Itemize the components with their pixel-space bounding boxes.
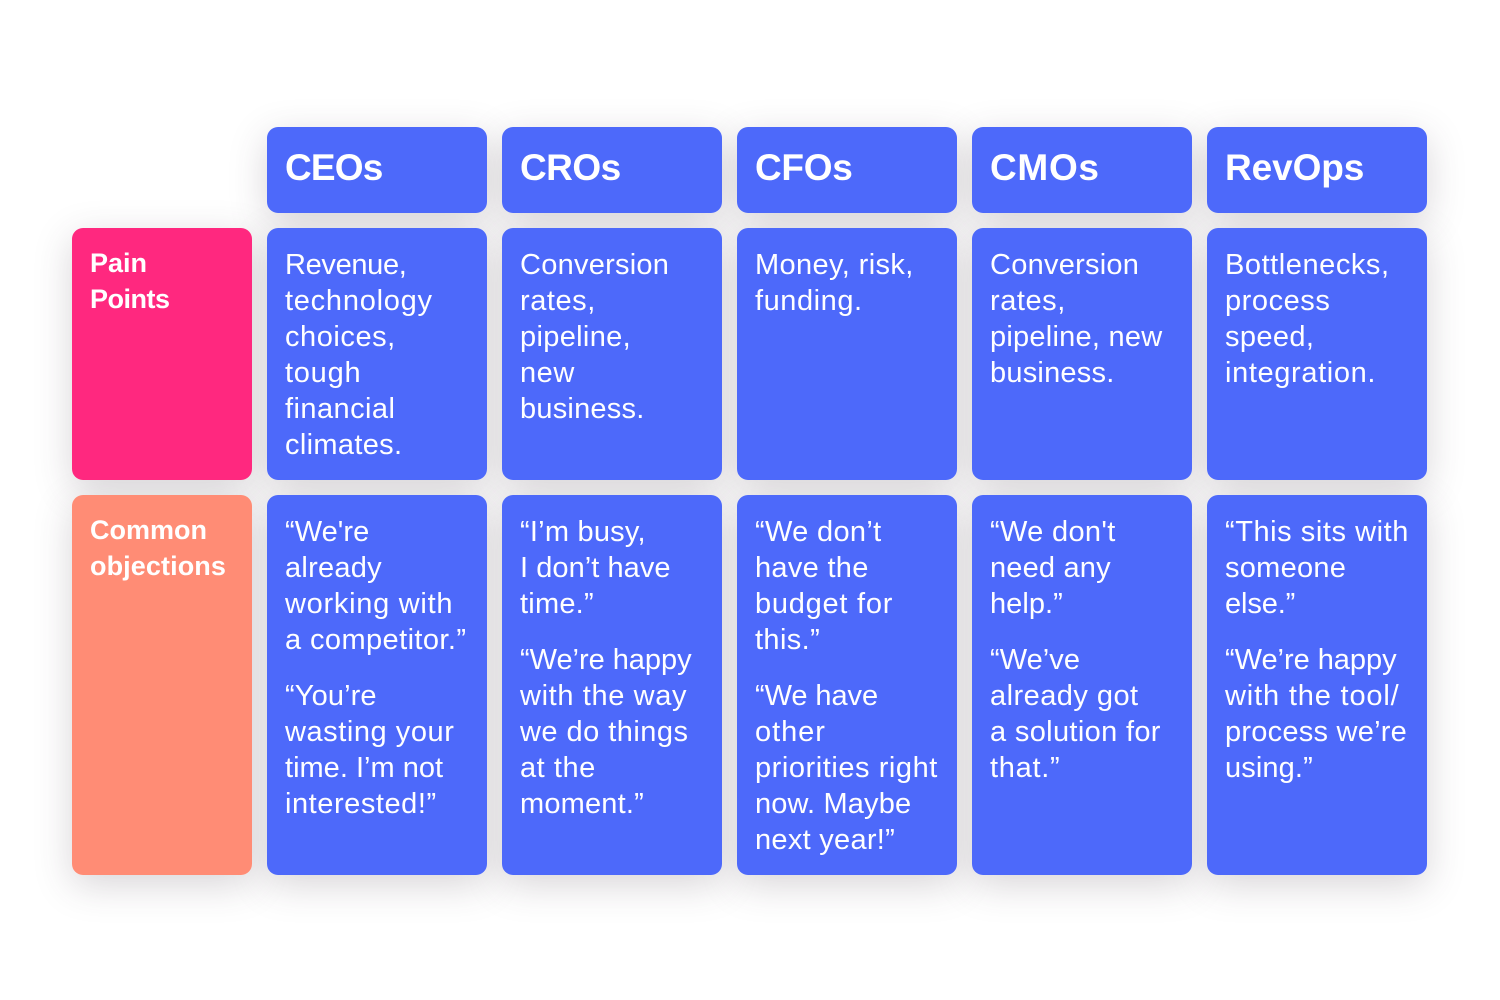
row label: Pain Points: Pain	[90, 248, 147, 278]
pain points: CEOs: financial	[285, 393, 395, 425]
objections: CFOs: next year!”	[755, 824, 895, 856]
objections: CEOs: “You’re	[285, 680, 377, 712]
objections: CMOs: that.”	[990, 752, 1060, 784]
objections: RevOps: someone	[1225, 552, 1346, 584]
row label: Pain Points	[72, 228, 252, 480]
pain points: RevOps: integration.	[1225, 357, 1376, 389]
objections: CMOs: already got	[990, 680, 1139, 712]
objections: CROs: “I’m busy,	[520, 516, 646, 548]
pain points: CMOs: pipeline, new	[990, 321, 1162, 353]
pain points: CEOs: climates.	[285, 429, 402, 461]
objections: CROs	[502, 495, 722, 875]
objections: CMOs: “We’ve	[990, 644, 1080, 676]
objections: CROs: at the	[520, 752, 596, 784]
objections: CROs: we do things	[520, 716, 688, 748]
objections: CEOs	[267, 495, 487, 875]
pain points: CMOs: business.	[990, 357, 1114, 389]
pain points: CROs	[502, 228, 722, 480]
row label: Common objections: Common	[90, 515, 207, 545]
objections: RevOps: “We’re happy	[1225, 644, 1397, 676]
pain points: CMOs: Conversion	[990, 249, 1139, 281]
objections: CFOs: “We have	[755, 680, 878, 712]
objections: RevOps: with the tool/	[1225, 680, 1400, 712]
pain points: CEOs: tough	[285, 357, 361, 389]
objections: CROs: “We’re happy	[520, 644, 692, 676]
objections: CEOs: “We're	[285, 516, 369, 548]
pain points: RevOps: process	[1225, 285, 1330, 317]
column header: CMOs	[972, 127, 1192, 213]
column header: CFOs: CFOs	[755, 147, 852, 188]
pain points: RevOps	[1207, 228, 1427, 480]
pain points: CROs: pipeline,	[520, 321, 631, 353]
objections: CFOs: have the	[755, 552, 869, 584]
objections: RevOps: using.”	[1225, 752, 1313, 784]
pain points: CEOs: Revenue,	[285, 249, 407, 281]
objections: CFOs: this.”	[755, 624, 820, 656]
objections: RevOps: else.”	[1225, 588, 1295, 620]
column header: CEOs: CEOs	[285, 147, 383, 188]
objections: CROs: with the way	[520, 680, 687, 712]
objections: CEOs: working with	[285, 588, 453, 620]
pain points: CEOs	[267, 228, 487, 480]
pain points: RevOps: Bottlenecks,	[1225, 249, 1390, 281]
pain points: CROs: new	[520, 357, 575, 389]
pain points: CROs: business.	[520, 393, 644, 425]
objections: CFOs	[737, 495, 957, 875]
objections: CEOs: time. I’m not	[285, 752, 443, 784]
objections: CFOs: now. Maybe	[755, 788, 911, 820]
pain points: CMOs: rates,	[990, 285, 1066, 317]
objections: RevOps	[1207, 495, 1427, 875]
objections: CEOs: already	[285, 552, 382, 584]
pain points: CROs: Conversion	[520, 249, 669, 281]
objections: CMOs: a solution for	[990, 716, 1161, 748]
pain points: CFOs: Money, risk,	[755, 249, 914, 281]
column header: CROs: CROs	[520, 147, 621, 188]
row label: Common objections: objections	[90, 551, 226, 581]
objections: CFOs: “We don’t	[755, 516, 882, 548]
column header: CFOs	[737, 127, 957, 213]
pain points: CEOs: technology	[285, 285, 433, 317]
pain points: CFOs: funding.	[755, 285, 863, 317]
pain points: CEOs: choices,	[285, 321, 396, 353]
objections: RevOps: process we’re	[1225, 716, 1407, 748]
objections: CMOs: need any	[990, 552, 1111, 584]
row label: Common objections	[72, 495, 252, 875]
row label: Pain Points: Points	[90, 284, 170, 314]
objections: CEOs: a competitor.”	[285, 624, 466, 656]
objections: CROs: I don’t have	[520, 552, 671, 584]
objections: CMOs: “We don't	[990, 516, 1116, 548]
objections: CMOs: help.”	[990, 588, 1063, 620]
objections: CFOs: budget for	[755, 588, 893, 620]
objections: CMOs	[972, 495, 1192, 875]
pain points: CFOs	[737, 228, 957, 480]
column header: RevOps: RevOps	[1225, 147, 1364, 188]
column header: CROs	[502, 127, 722, 213]
column header: CEOs	[267, 127, 487, 213]
pain points: CMOs	[972, 228, 1192, 480]
objections: RevOps: “This sits with	[1225, 516, 1409, 548]
objections: CFOs: priorities right	[755, 752, 938, 784]
pain points: RevOps: speed,	[1225, 321, 1314, 353]
objections: CROs: moment.”	[520, 788, 644, 820]
column header: CMOs: CMOs	[990, 147, 1100, 188]
objections: CEOs: interested!”	[285, 788, 437, 820]
objections: CFOs: other	[755, 716, 826, 748]
column header: RevOps	[1207, 127, 1427, 213]
objections: CEOs: wasting your	[285, 716, 454, 748]
objections: CROs: time.”	[520, 588, 594, 620]
pain points: CROs: rates,	[520, 285, 596, 317]
